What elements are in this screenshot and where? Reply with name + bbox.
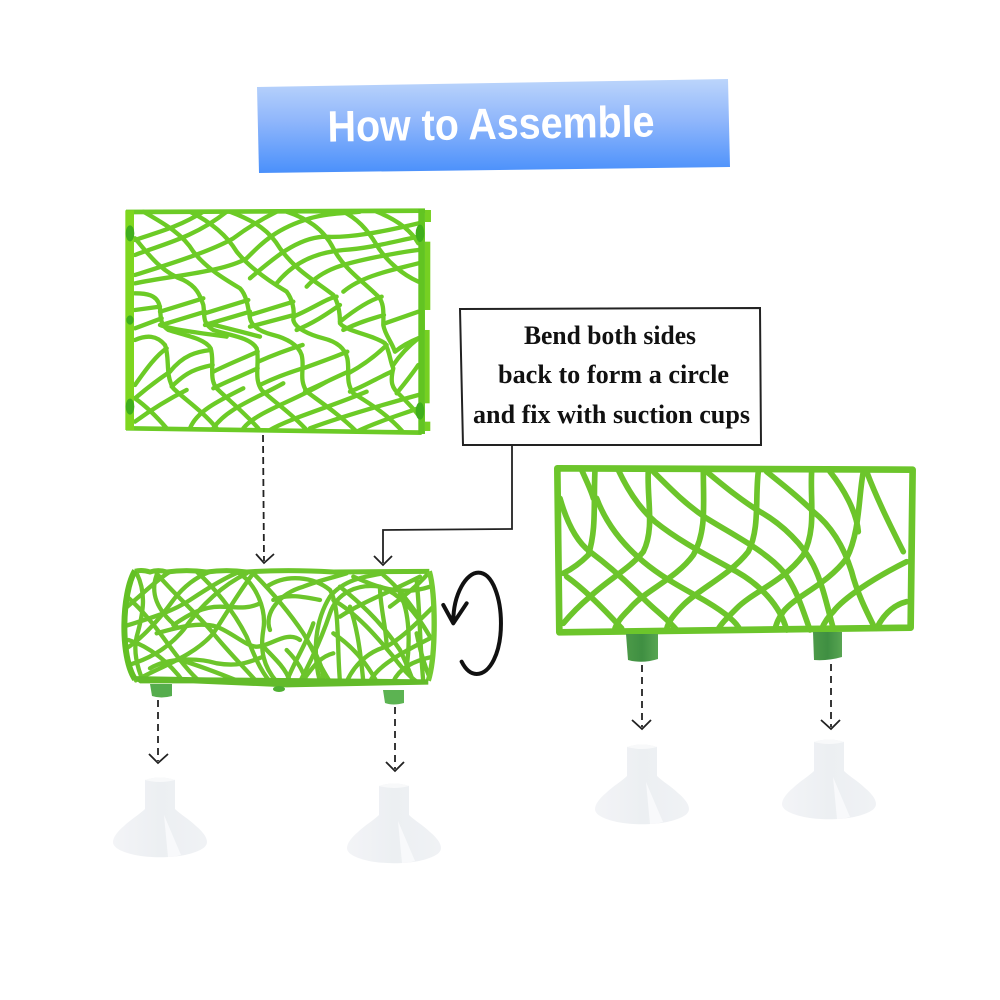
dashed arrow: cylinder to left cup <box>149 700 168 763</box>
callout text <box>473 321 750 429</box>
dashed arrow: panel to right cup <box>821 664 840 729</box>
callout box <box>460 308 761 445</box>
panel pegs <box>626 632 842 662</box>
suction cup 4 <box>782 740 876 819</box>
suction cup 2 <box>347 784 441 863</box>
dashed arrow: flat mesh to cylinder <box>256 435 274 563</box>
dashed arrow: cylinder to right cup <box>386 707 404 771</box>
flat mesh panel <box>125 208 431 435</box>
callout text: Bend both sides <box>524 321 696 350</box>
cylinder pegs <box>150 684 404 704</box>
connector arrow: callout to cylinder <box>374 446 512 565</box>
callout text: back to form a circle <box>498 360 729 389</box>
rolled cylinder mesh <box>123 570 434 687</box>
suction cup 3 <box>595 744 689 824</box>
suction cup 1 <box>113 778 207 857</box>
dashed arrow: panel to left cup <box>632 665 651 729</box>
callout text: and fix with suction cups <box>473 400 750 429</box>
flat narrow mesh panel <box>557 468 913 632</box>
title banner <box>257 79 730 173</box>
title text: How to Assemble <box>327 97 655 152</box>
rotation arrow <box>443 573 501 674</box>
